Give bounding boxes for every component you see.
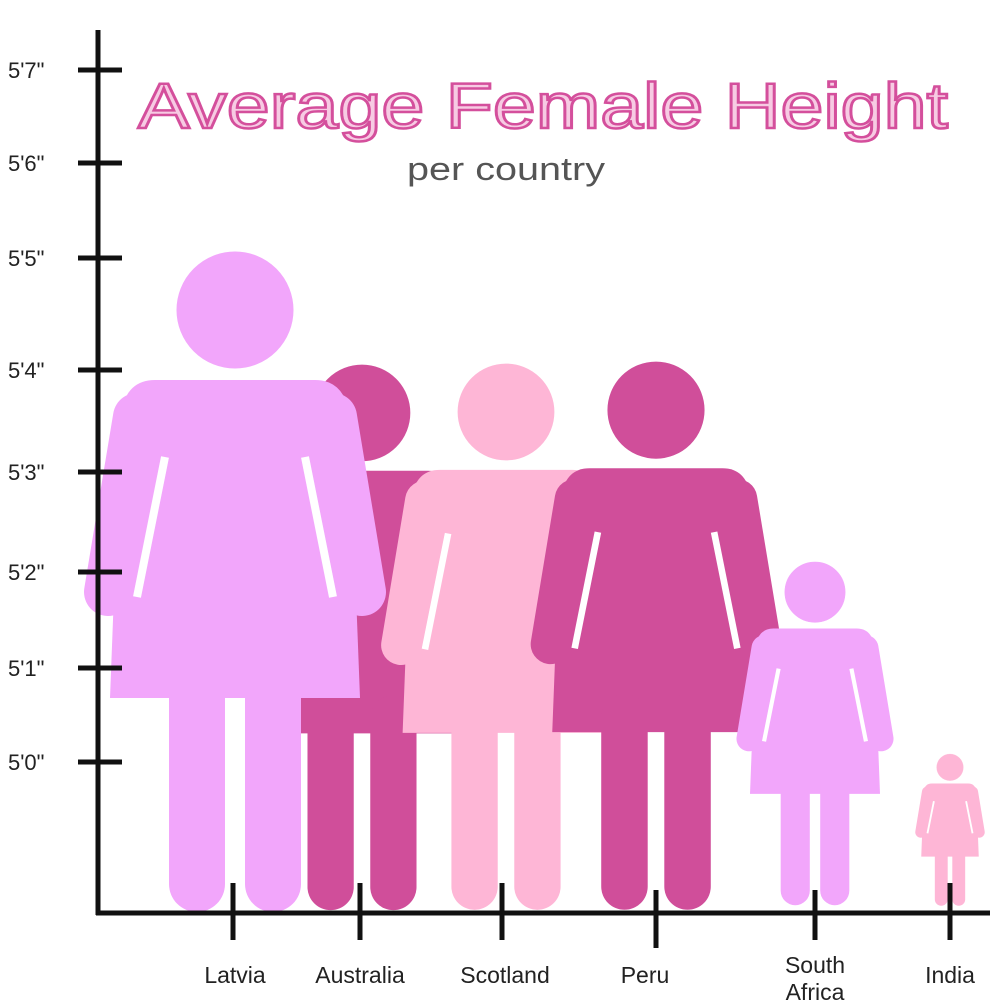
y axis <box>78 30 122 915</box>
x axis <box>96 883 990 948</box>
y axis labels: 5'1" <box>8 656 44 681</box>
x axis labels: India <box>925 962 975 988</box>
figure: Australia <box>257 365 467 910</box>
title: Average Female Height <box>138 70 948 142</box>
y axis labels: 5'6" <box>8 151 44 176</box>
x axis labels: Peru <box>621 962 669 988</box>
figure: Peru <box>551 362 761 910</box>
x axis labels: Australia <box>315 962 405 988</box>
y axis labels: 5'0" <box>8 750 44 775</box>
figure: India <box>921 754 979 906</box>
y axis labels: 5'7" <box>8 58 44 83</box>
x axis labels: Latvia <box>204 962 266 988</box>
figure: South Africa <box>749 562 881 905</box>
y axis labels: 5'3" <box>8 460 44 485</box>
y axis labels: 5'2" <box>8 560 44 585</box>
figure: Scotland <box>401 364 611 910</box>
x axis labels: Africa <box>786 979 845 1005</box>
x axis labels: South <box>785 952 845 978</box>
subtitle: per country <box>407 151 605 187</box>
y axis labels: 5'5" <box>8 246 44 271</box>
figure: Latvia <box>108 252 362 912</box>
x axis labels: Scotland <box>460 962 550 988</box>
x axis labels <box>204 952 975 1005</box>
y axis labels: 5'4" <box>8 358 44 383</box>
y axis labels <box>8 58 44 775</box>
